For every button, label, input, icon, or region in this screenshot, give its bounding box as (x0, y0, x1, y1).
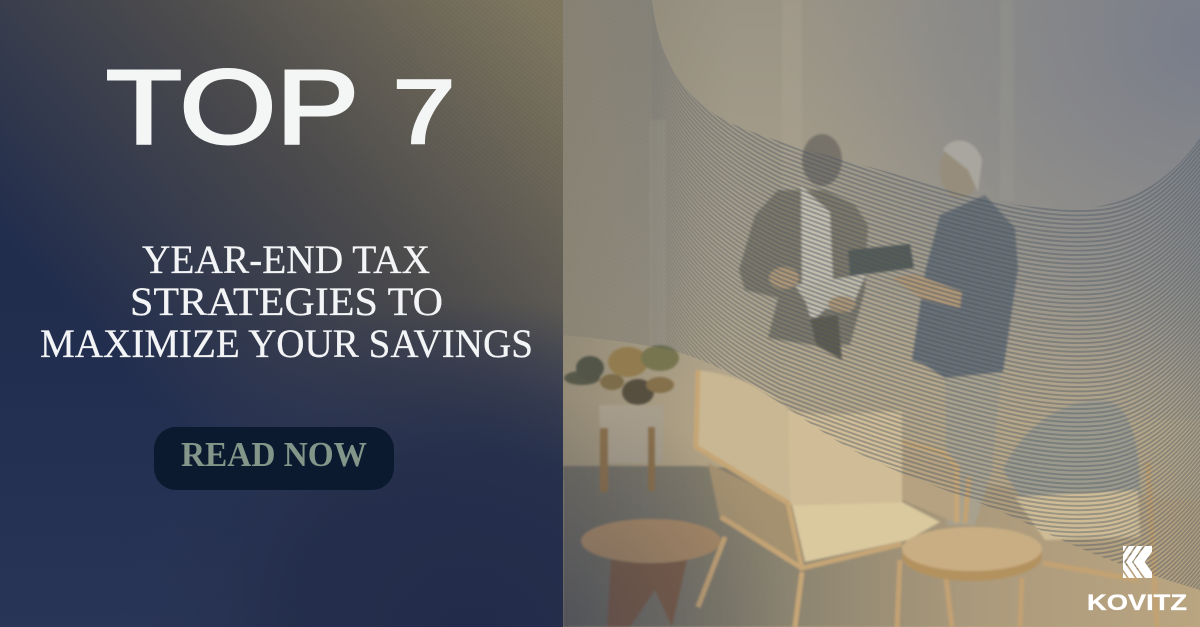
right armchair (965, 400, 1157, 627)
title: TOP 7: TOP (106, 49, 359, 166)
floor (563, 465, 1090, 627)
subtitle: MAXIMIZE YOUR SAVINGS (40, 321, 533, 366)
logo: Kovitz (1088, 546, 1186, 610)
round side table (897, 527, 1042, 627)
logo: Kovitz: KOVITZ (1087, 590, 1187, 615)
plant (564, 345, 679, 405)
subtitle: YEAR-END TAX (142, 237, 430, 282)
icon: Kovitz K mark (1123, 546, 1152, 578)
background photo: meeting in lounge (563, 0, 1200, 627)
tablet and hand (848, 244, 962, 308)
left gradient panel (0, 0, 563, 627)
left edge navy tint (563, 439, 752, 627)
curtain folds (650, 0, 1014, 360)
left wooden stool (581, 519, 721, 627)
title: TOP 7 (106, 49, 455, 166)
man right (912, 141, 1018, 525)
title: TOP 7: 7 (393, 63, 455, 163)
subtitle: STRATEGIES TO (130, 279, 443, 324)
man left (739, 134, 868, 360)
button: read now (154, 427, 394, 490)
button: read now: READ NOW (181, 435, 367, 474)
planter and stand (599, 405, 664, 492)
subtitle (40, 237, 533, 366)
wave line band (563, 0, 1200, 627)
armchair (696, 370, 957, 627)
